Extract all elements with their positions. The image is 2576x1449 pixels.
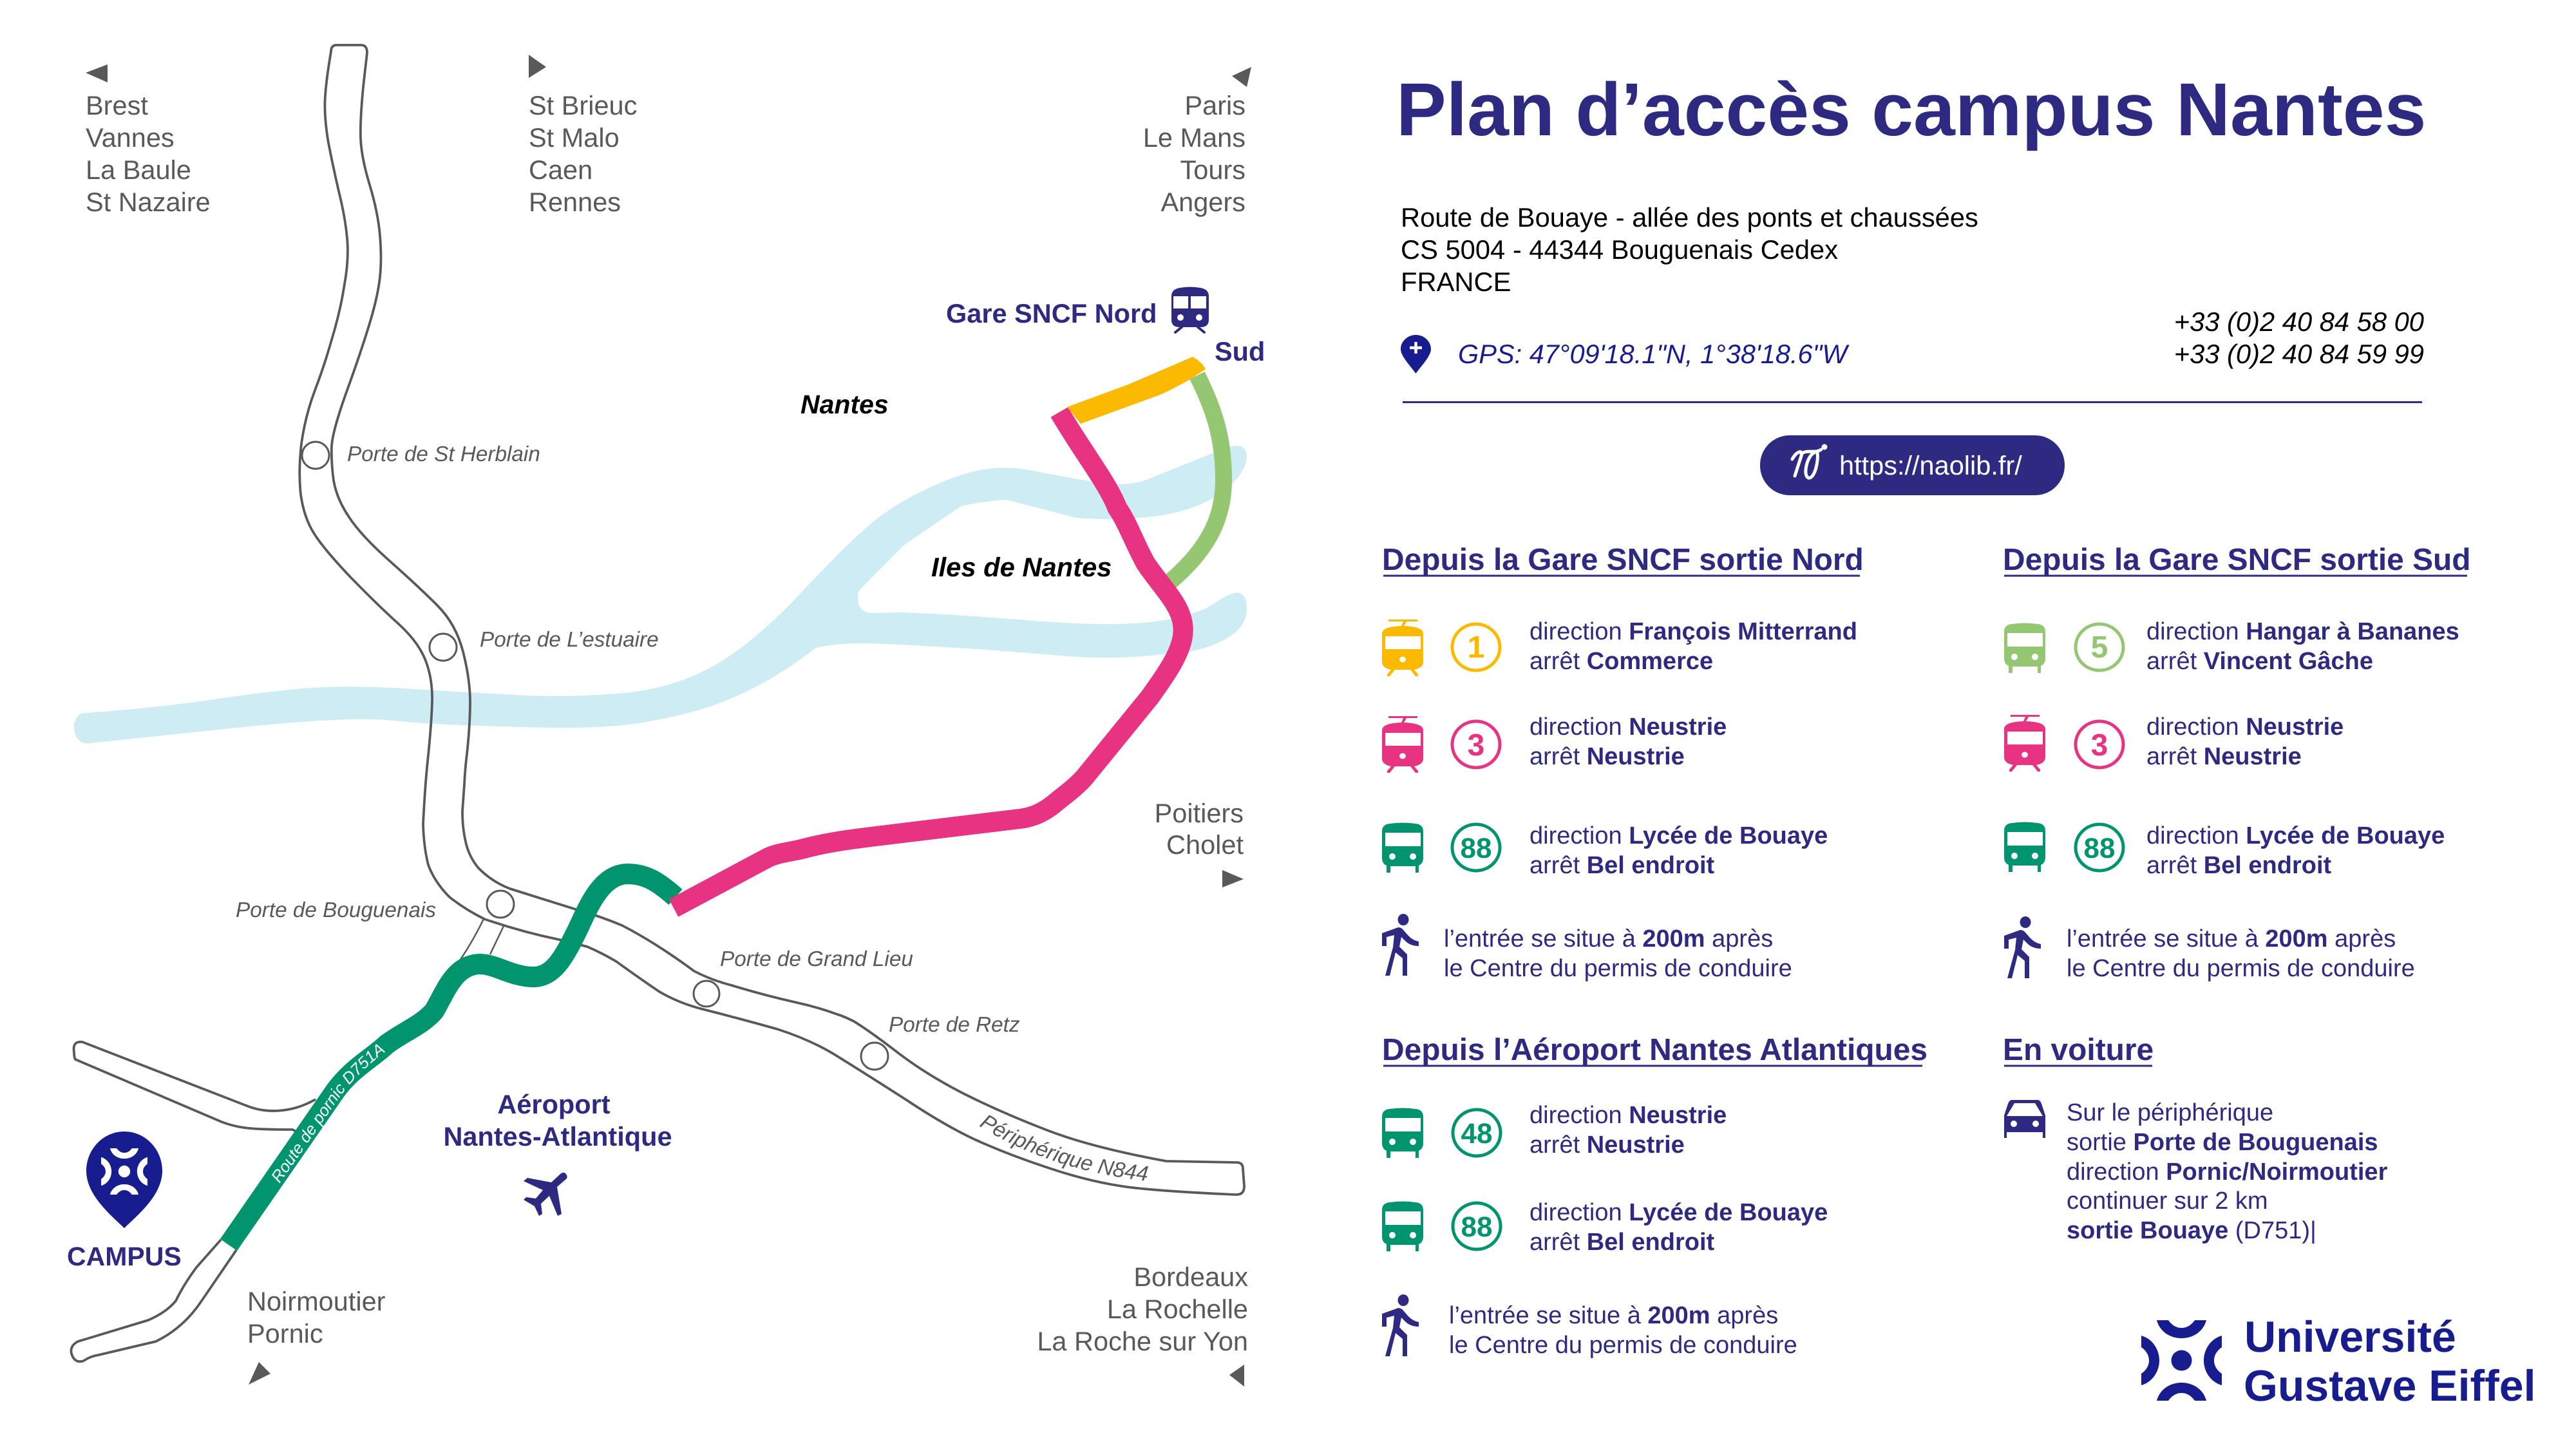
badge: line 3: 3 — [2091, 728, 2108, 762]
button: naolib: https://naolib.fr/ — [1839, 450, 2022, 480]
destinations: north-west: La Baule — [86, 155, 191, 185]
destinations: Noirmoutier: Pornic — [247, 1318, 323, 1349]
guide for route label — [279, 1046, 393, 1184]
river: Loire — [74, 446, 1247, 743]
labels: interchanges: Porte de Retz — [889, 1013, 1020, 1037]
panel: depuis la gare sortie nord — [1382, 543, 1864, 982]
labels: interchanges: Porte de L’estuaire — [480, 628, 659, 652]
destinations: north-west: St Nazaire — [86, 187, 211, 217]
tram line 5 light green — [1169, 375, 1224, 583]
divider — [1403, 401, 2422, 403]
badge: line 1 — [1452, 624, 1500, 670]
label: Gare SNCF Nord: Gare SNCF Nord — [946, 298, 1157, 328]
directions line 88: direction Lycée de Bouaye — [2146, 822, 2445, 849]
directions line 88: direction Lycée de Bouaye — [1530, 1199, 1828, 1226]
logo: Université Gustave Eiffel — [2141, 1312, 2536, 1410]
badge: line 3: 3 — [1468, 728, 1484, 762]
icon: tram 3 — [1382, 716, 1423, 773]
icon: GPS pin — [1401, 335, 1431, 374]
heading: Depuis la Gare SNCF sortie Sud — [2003, 543, 2471, 577]
walking directions — [1444, 925, 1792, 982]
address block: FRANCE — [1401, 267, 1511, 297]
badge: line 3 — [2076, 721, 2123, 768]
icon: car — [2004, 1100, 2045, 1138]
logo text: Université — [2244, 1312, 2456, 1361]
labels: interchanges — [236, 442, 1020, 1037]
directions line 3: arrêt Neustrie — [1530, 743, 1685, 770]
walking directions: l’entrée se situe à 200m après — [2067, 925, 2396, 952]
badge: line 5: 5 — [2091, 630, 2108, 665]
destinations: Poitiers: Cholet — [1166, 829, 1244, 860]
label: airport: Nantes-Atlantique — [443, 1121, 672, 1151]
button: naolib — [1760, 435, 2065, 495]
tram line 1 yellow — [1067, 357, 1206, 424]
destinations: north: St Malo — [529, 122, 620, 153]
walking directions: le Centre du permis de conduire — [1444, 955, 1792, 982]
logo symbol — [2141, 1320, 2222, 1401]
destinations: north: St Brieuc — [529, 90, 637, 120]
arrow west — [86, 64, 108, 82]
icon: walker — [2004, 916, 2041, 978]
icon: bus 48 — [1382, 1108, 1423, 1158]
GPS coordinates: GPS: 47°09'18.1"N, 1°38'18.6"W — [1458, 339, 1850, 369]
destinations: north-east — [1143, 67, 1251, 217]
badge: line 88 — [1453, 1203, 1501, 1249]
destinations: north: Rennes — [529, 187, 621, 217]
badge: line 88: 88 — [1461, 833, 1492, 864]
logo text — [2244, 1312, 2536, 1410]
badge: line 3 — [1452, 721, 1500, 768]
walking directions: l’entrée se situe à 200m après — [1449, 1302, 1778, 1329]
directions line 48: arrêt Neustrie — [1530, 1132, 1685, 1159]
road: périphérique N844 — [299, 45, 1244, 1195]
labels: interchanges: Porte de St Herblain — [347, 442, 540, 466]
heading: Depuis l’Aéroport Nantes Atlantiques — [1382, 1033, 1927, 1067]
icon: tram 3 — [2004, 715, 2045, 772]
driving directions — [2067, 1099, 2388, 1244]
directions line 48: direction Neustrie — [1530, 1102, 1727, 1129]
badge: line 48: 48 — [1461, 1118, 1492, 1150]
phone numbers — [2174, 307, 2424, 369]
arrow south-west — [249, 1362, 270, 1385]
destinations: north — [529, 55, 637, 217]
heading: En voiture — [2003, 1033, 2154, 1067]
directions line 88 — [1530, 1199, 1828, 1256]
labels: interchanges: Porte de Grand Lieu — [720, 947, 913, 971]
directions line 88: arrêt Bel endroit — [1530, 1229, 1715, 1256]
destinations: north-east: Paris — [1184, 90, 1245, 120]
arrow east — [1222, 870, 1244, 887]
directions line 5: direction Hangar à Bananes — [2146, 618, 2459, 645]
icon: walker — [1382, 914, 1419, 976]
directions line 5 — [2146, 618, 2459, 675]
directions line 3: arrêt Neustrie — [2146, 743, 2302, 770]
destinations: Noirmoutier: Noirmoutier — [247, 1286, 386, 1316]
icon: bus 88 — [1382, 823, 1423, 873]
icon: bus 5 — [2004, 623, 2045, 673]
icon: bus 88 — [2004, 822, 2045, 872]
label: airport — [443, 1089, 672, 1151]
address block: CS 5004 - 44344 Bouguenais Cedex — [1401, 234, 1838, 265]
panel: map — [67, 44, 1265, 1387]
driving directions: direction Pornic/Noirmoutier — [2067, 1159, 2388, 1186]
road: west branch — [74, 1042, 316, 1135]
icon: tram 1 — [1382, 620, 1423, 676]
destinations: Bordeaux: La Roche sur Yon — [1037, 1326, 1248, 1356]
phone numbers: +33 (0)2 40 84 58 00 — [2174, 307, 2424, 337]
destinations: north-west: Brest — [86, 90, 148, 120]
directions line 48 — [1530, 1102, 1727, 1159]
label: Nantes: Nantes — [800, 390, 889, 419]
label: airport: Aéroport — [497, 1089, 611, 1119]
destinations: Bordeaux: Bordeaux — [1133, 1262, 1248, 1292]
directions line 1 — [1530, 618, 1857, 675]
directions line 5: arrêt Vincent Gâche — [2146, 648, 2373, 675]
phone numbers: +33 (0)2 40 84 59 99 — [2174, 339, 2424, 369]
road: south to Noirmoutier — [71, 1240, 236, 1361]
label: campus: CAMPUS — [67, 1242, 182, 1271]
heading: Depuis la Gare SNCF sortie Nord — [1382, 543, 1864, 577]
arrow south-east — [1229, 1365, 1244, 1387]
destinations: north-west — [86, 64, 211, 217]
address block — [1401, 202, 1978, 297]
label: Iles de Nantes: Iles de Nantes — [931, 552, 1112, 582]
driving directions: Sur le périphérique — [2067, 1099, 2273, 1126]
driving directions: sortie Bouaye (D751)| — [2067, 1217, 2316, 1244]
directions line 88: arrêt Bel endroit — [1530, 852, 1715, 879]
badge: line 88: 88 — [1461, 1211, 1492, 1243]
directions line 3 — [2146, 714, 2344, 770]
destinations: north-west: Vannes — [86, 122, 175, 153]
destinations: Poitiers — [1155, 798, 1244, 887]
title: Plan d’accès campus Nantes — [1396, 68, 2426, 151]
directions line 1: arrêt Commerce — [1530, 648, 1713, 675]
badge: line 48 — [1453, 1110, 1501, 1156]
icon: campus pin — [86, 1132, 162, 1228]
label: Sud: Sud — [1215, 336, 1265, 366]
label: route de Pornic: Route de pornic D751A — [272, 1044, 385, 1184]
panel: depuis la gare sortie sud — [2003, 543, 2471, 982]
label: périphérique: Périphérique N844 — [979, 1115, 1149, 1181]
icon: walker — [1382, 1294, 1419, 1356]
destinations: Bordeaux — [1037, 1262, 1248, 1387]
address block: Route de Bouaye - allée des ponts et chaussées — [1401, 202, 1978, 232]
destinations: north-east: Le Mans — [1143, 122, 1245, 153]
icon: plane — [524, 1173, 567, 1216]
directions line 3 — [1530, 714, 1727, 770]
destinations: north-east: Tours — [1180, 155, 1245, 185]
destinations: Bordeaux: La Rochelle — [1107, 1294, 1248, 1324]
arrow to Paris — [1232, 67, 1251, 87]
tram line 3 pink — [674, 412, 1183, 908]
driving directions: sortie Porte de Bouguenais — [2067, 1129, 2378, 1156]
arrow north-east — [529, 55, 546, 78]
panel: en voiture — [2003, 1033, 2388, 1244]
icon: naolib — [1792, 444, 1828, 478]
icon: train — [1171, 287, 1209, 332]
directions line 3: direction Neustrie — [2146, 714, 2344, 741]
directions line 1: direction François Mitterrand — [1530, 618, 1857, 645]
destinations: north: Caen — [529, 155, 592, 185]
badge: line 1: 1 — [1468, 630, 1484, 665]
badge: line 88: 88 — [2084, 833, 2115, 864]
directions line 88 — [2146, 822, 2445, 879]
directions line 3: direction Neustrie — [1530, 714, 1727, 741]
bus line green route — [229, 874, 676, 1245]
destinations: Noirmoutier — [247, 1286, 386, 1385]
walking directions — [1449, 1302, 1797, 1359]
guide for périphérique label — [979, 1126, 1161, 1182]
panel: depuis l'aéroport — [1382, 1033, 1927, 1359]
interchange circles — [302, 442, 888, 1070]
driving directions: continuer sur 2 km — [2067, 1188, 2268, 1215]
directions line 88: direction Lycée de Bouaye — [1530, 822, 1828, 849]
badge: line 88 — [2076, 824, 2123, 871]
logo text: Gustave Eiffel — [2244, 1361, 2536, 1410]
walking directions: le Centre du permis de conduire — [1449, 1332, 1797, 1359]
directions line 88 — [1530, 822, 1828, 879]
labels: interchanges: Porte de Bouguenais — [236, 898, 436, 922]
badge: line 5 — [2076, 624, 2123, 670]
walking directions: le Centre du permis de conduire — [2067, 955, 2415, 982]
destinations: north-east: Angers — [1160, 187, 1245, 217]
destinations: Poitiers: Poitiers — [1155, 798, 1244, 828]
walking directions: l’entrée se situe à 200m après — [1444, 925, 1773, 952]
badge: line 88 — [1452, 824, 1500, 871]
icon: bus 88 — [1382, 1202, 1423, 1251]
directions line 88: arrêt Bel endroit — [2146, 852, 2332, 879]
walking directions — [2067, 925, 2415, 982]
road: Bouguenais connector — [460, 919, 504, 960]
